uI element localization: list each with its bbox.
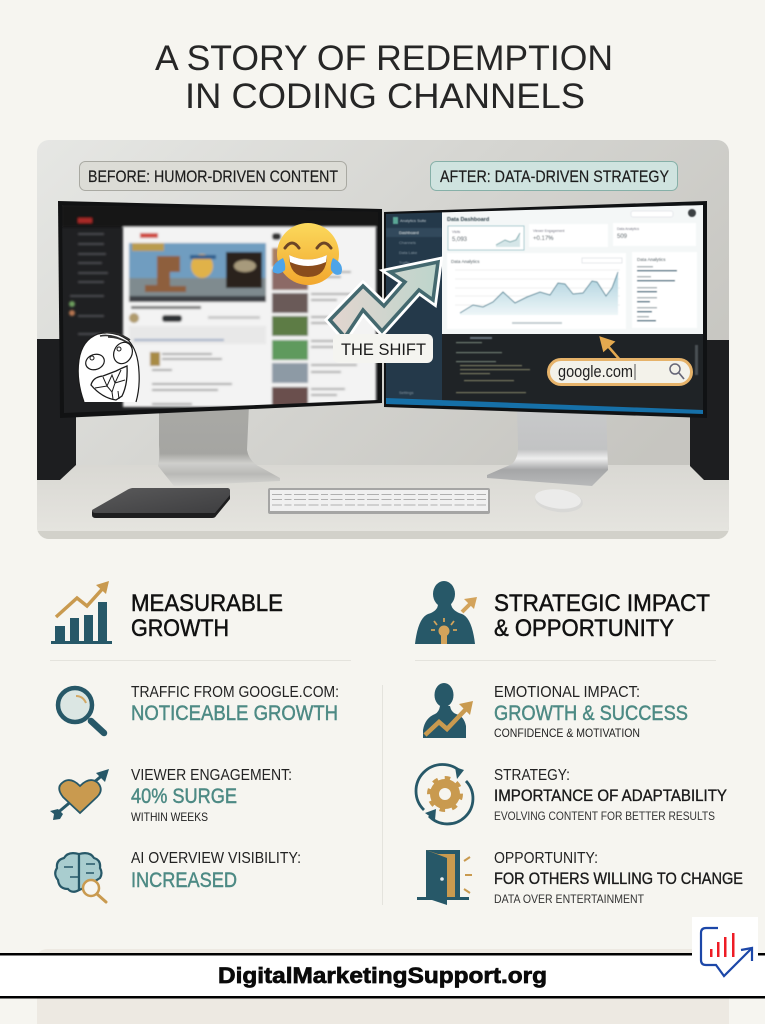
text: opportunity: DATA OVER ENTERTAINMENT xyxy=(494,892,645,906)
icon: open door xyxy=(417,850,472,905)
tablet on desk xyxy=(92,488,230,518)
right monitor xyxy=(384,201,707,418)
text: strategy: EVOLVING CONTENT FOR BETTER RESULTS xyxy=(494,809,715,823)
before label: BEFORE: HUMOR-DRIVEN CONTENT xyxy=(88,168,338,186)
heading: measurable growth: MEASURABLE xyxy=(131,590,283,617)
the shift label xyxy=(333,334,433,363)
keyboard xyxy=(268,488,490,514)
text: viewer engagement xyxy=(131,767,292,824)
left monitor xyxy=(58,201,382,420)
text: ai overview visibility: AI OVERVIEW VISIBILITY: xyxy=(131,850,301,867)
arrow: pointer to dashboard xyxy=(601,338,620,360)
logo xyxy=(692,917,758,985)
right monitor: Settings xyxy=(399,390,413,395)
text: emotional impact: GROWTH & SUCCESS xyxy=(494,702,688,725)
right monitor: Visits xyxy=(452,230,461,234)
right monitor: Data Analytics xyxy=(451,259,480,264)
panel: strategic impact and opportunity xyxy=(415,581,743,906)
icon: gear with cycle arrows xyxy=(416,765,473,824)
panel: measurable growth xyxy=(50,581,351,902)
right speaker xyxy=(690,340,729,480)
icon: growth bar chart xyxy=(51,581,112,644)
footer background card xyxy=(37,949,729,1024)
right monitor: Traffic xyxy=(399,260,410,265)
after label: AFTER: DATA-DRIVEN STRATEGY xyxy=(440,168,669,186)
heading: measurable growth: GROWTH xyxy=(131,615,229,642)
footer band: DigitalMarketingSupport.org xyxy=(218,963,547,988)
arrow: the shift xyxy=(330,262,438,337)
after label xyxy=(430,162,678,190)
text: viewer engagement: VIEWER ENGAGEMENT: xyxy=(131,767,292,784)
text: strategy: IMPORTANCE OF ADAPTABILITY xyxy=(494,787,727,805)
right monitor: +0.17% xyxy=(533,236,554,242)
right monitor: 509 xyxy=(617,234,628,240)
heading: strategic impact and opportunity: STRATEGIC IMPACT xyxy=(494,590,710,617)
right monitor stand xyxy=(487,448,608,486)
text: opportunity xyxy=(494,850,743,906)
title: IN CODING CHANNELS xyxy=(185,77,585,116)
right monitor: 5,093 xyxy=(452,237,468,243)
mouse xyxy=(535,489,582,512)
text: viewer engagement: WITHIN WEEKS xyxy=(131,810,208,824)
text: traffic from google.com: TRAFFIC FROM GOOGLE.COM: xyxy=(131,684,339,701)
text: emotional impact xyxy=(494,684,688,740)
right monitor: Data Lake xyxy=(399,250,418,255)
heading: strategic impact and opportunity xyxy=(494,590,710,642)
text: opportunity: OPPORTUNITY: xyxy=(494,850,598,867)
google.com search bar xyxy=(548,360,692,384)
right monitor: Data Dashboard xyxy=(447,217,489,223)
text: ai overview visibility: INCREASED xyxy=(131,869,237,892)
icon: heart with arrow xyxy=(50,769,109,820)
right monitor: Viewer Engagement xyxy=(533,229,564,233)
left speaker xyxy=(37,339,76,480)
text: emotional impact: CONFIDENCE & MOTIVATION xyxy=(494,726,640,740)
the shift label: THE SHIFT xyxy=(341,340,426,359)
title xyxy=(155,39,613,116)
heading: measurable growth xyxy=(131,590,283,642)
left monitor stand xyxy=(158,405,280,486)
icon: laughing emoji xyxy=(273,223,342,285)
icon: person with light bulb xyxy=(415,581,477,644)
icon: person with rising arrow xyxy=(423,683,473,738)
right monitor: Dashboard xyxy=(399,230,419,235)
footer band xyxy=(0,953,765,998)
right monitor: Channels xyxy=(399,240,416,245)
panel: hero desk scene with two monitors xyxy=(37,140,729,539)
right monitor: Data Analytics xyxy=(617,227,639,231)
icon: magnifying glass xyxy=(58,688,104,733)
text: traffic from google.com xyxy=(131,684,339,725)
text: traffic from google.com: NOTICEABLE GROWTH xyxy=(131,702,338,725)
right monitor: Data Analytics xyxy=(637,257,666,262)
right monitor: Analytics Suite xyxy=(400,218,427,223)
text: ai overview visibility xyxy=(131,850,301,892)
text: strategy xyxy=(494,767,727,823)
before label xyxy=(80,162,346,190)
icon: rage comic face xyxy=(78,333,139,402)
google.com search bar: google.com xyxy=(558,362,633,381)
text: emotional impact: EMOTIONAL IMPACT: xyxy=(494,684,640,701)
heading: strategic impact and opportunity: & OPPORTUNITY xyxy=(494,615,674,642)
text: viewer engagement: 40% SURGE xyxy=(131,785,237,808)
icon: brain with magnifier xyxy=(55,853,106,902)
title: A STORY OF REDEMPTION xyxy=(155,39,613,78)
text: strategy: STRATEGY: xyxy=(494,767,570,784)
